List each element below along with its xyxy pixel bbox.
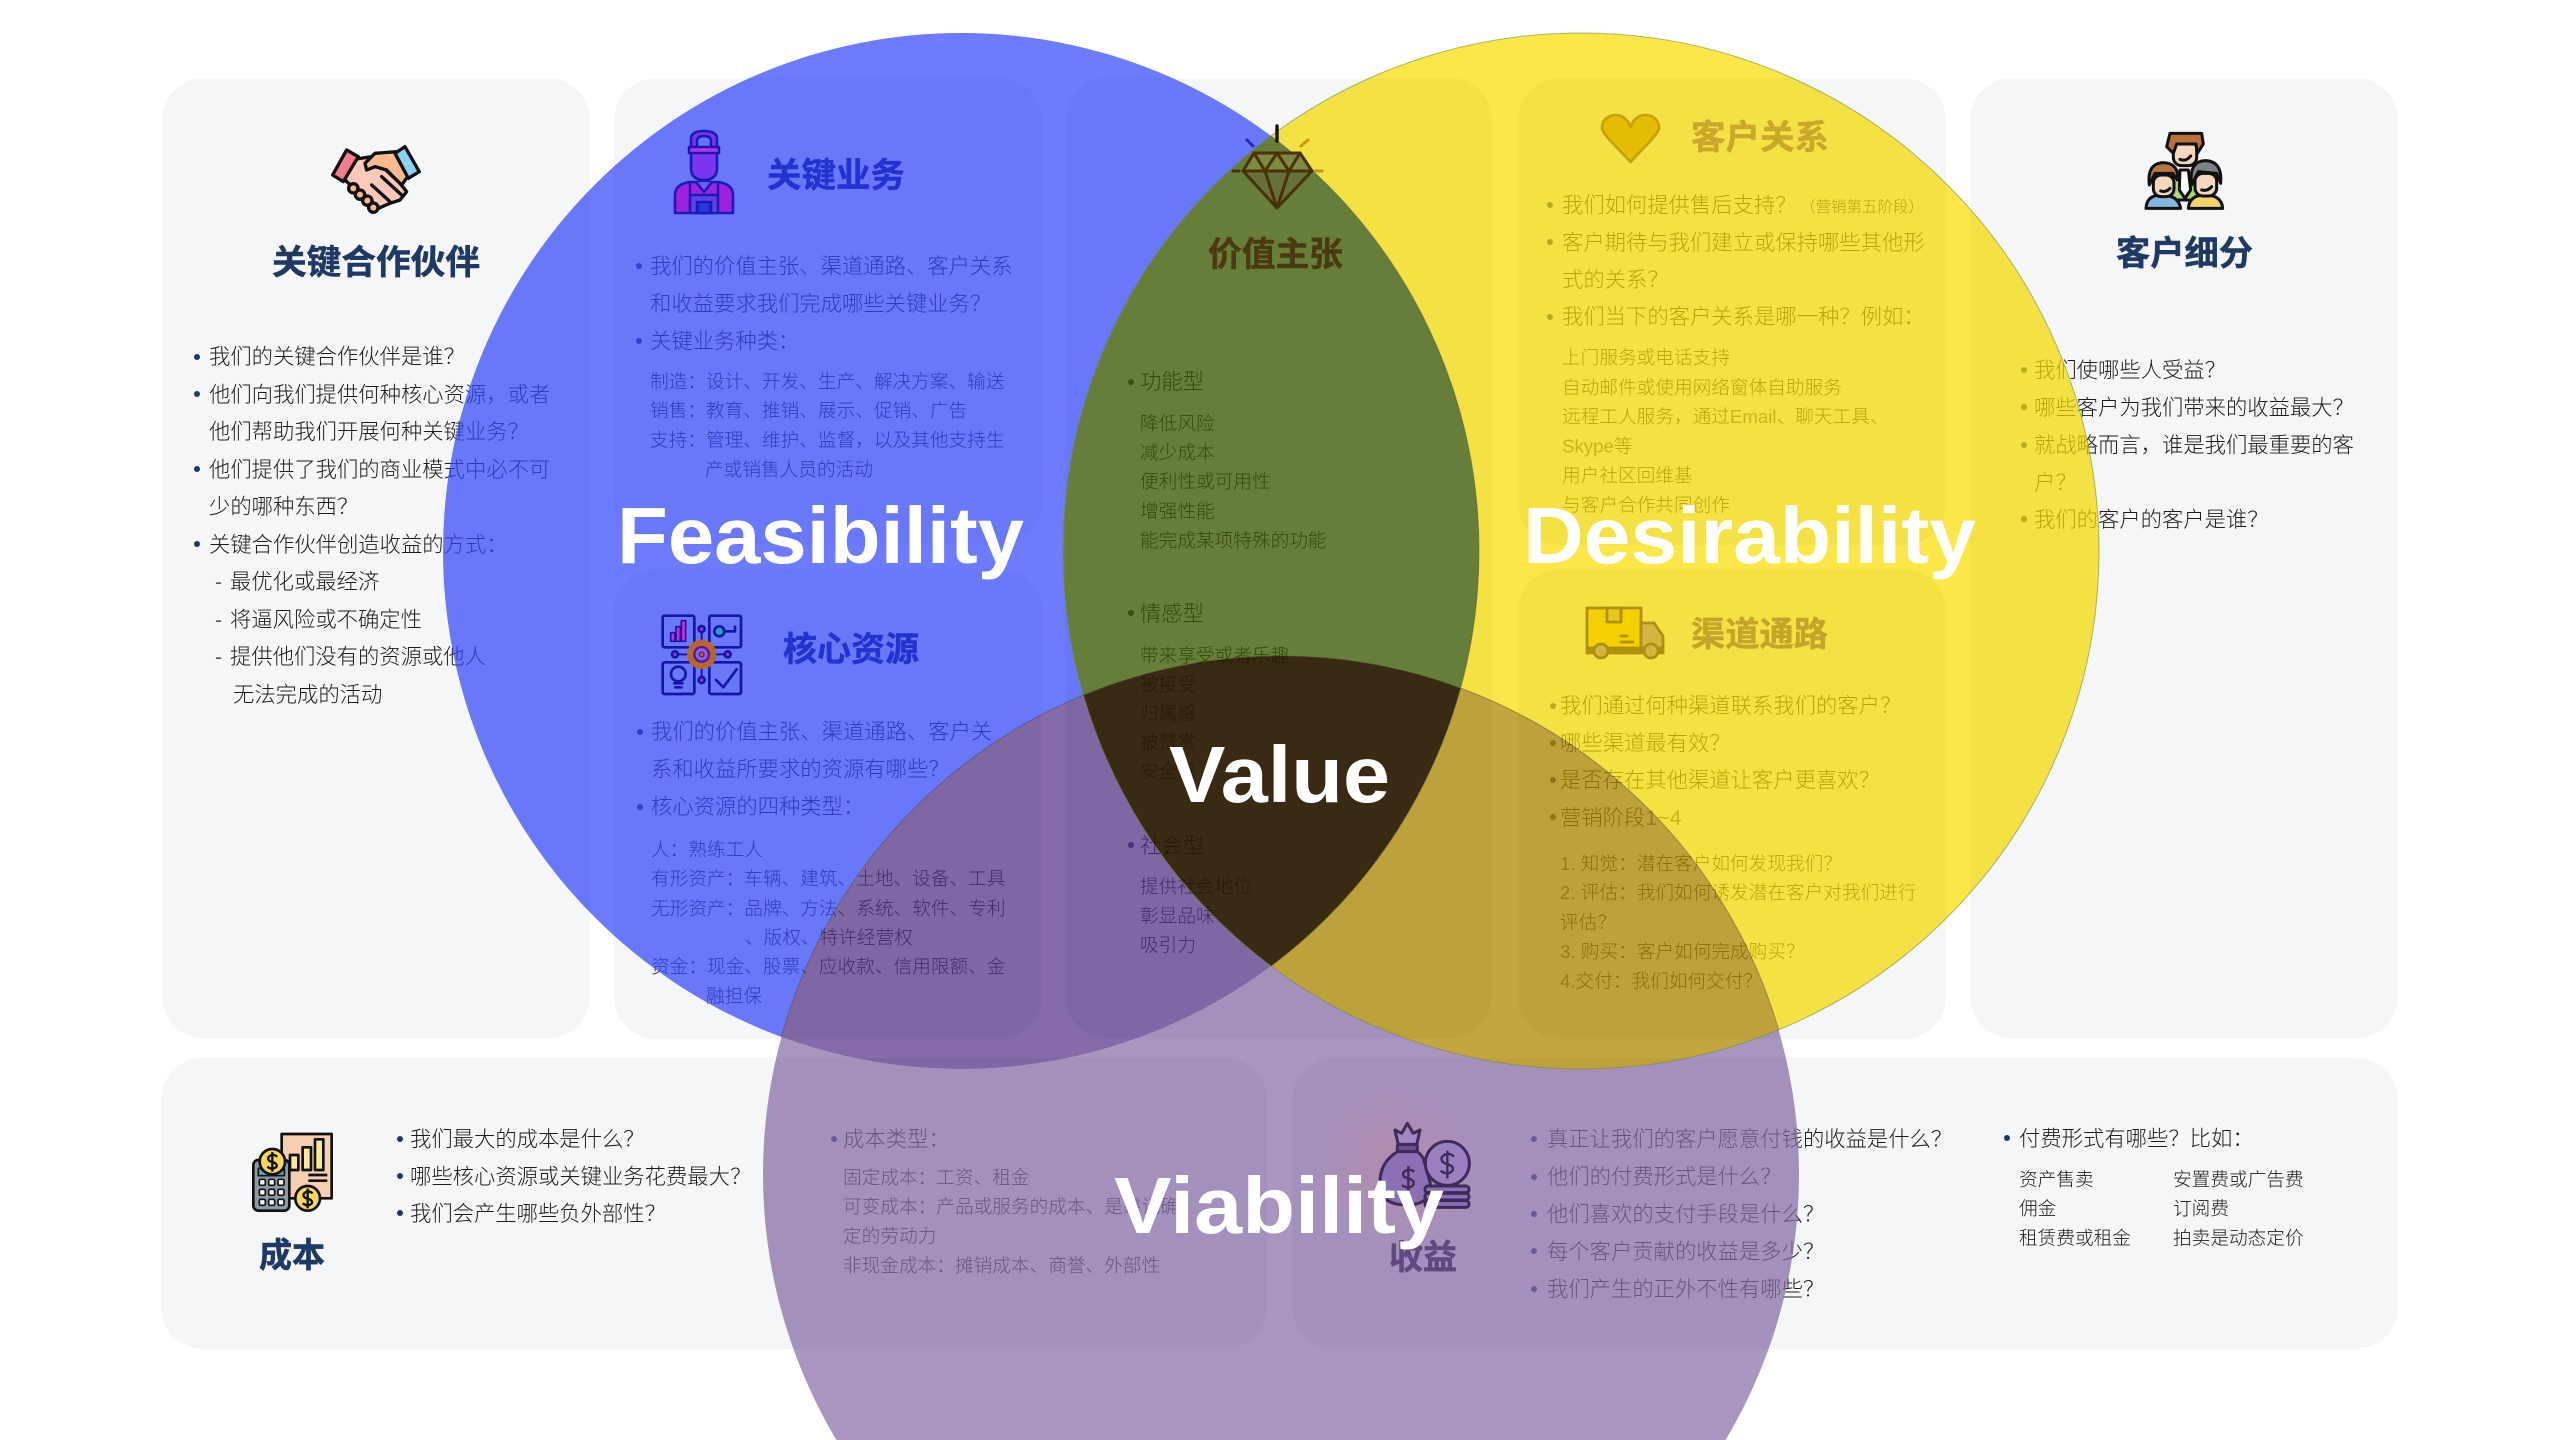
text: payment forms: 订阅费 [2173, 1198, 2229, 1219]
panel: cost structure [161, 1058, 1267, 1349]
text: revenue questions [1531, 1122, 1952, 1304]
text: key partners questions: - [215, 608, 222, 632]
text: key partners questions: 他们向我们提供何种核心资源，或者 [209, 378, 550, 409]
icon: handshake [333, 147, 419, 212]
icon: key resources [663, 616, 741, 694]
text: channels questions: 评估？ [1560, 908, 1616, 935]
panel: customer segments [1970, 78, 2398, 1038]
text: customer segments questions: 就战略而言，谁是我们最重要的客 [2034, 428, 2354, 460]
text: value proposition types: 降低风险 [1140, 413, 1215, 434]
heading: customer segments: 客户细分 [2116, 235, 2253, 273]
text: key partners questions: 无法完成的活动 [233, 683, 382, 707]
text: customer segments questions [2021, 354, 2354, 534]
text: key partners questions: 我们的关键合作伙伴是谁？ [209, 340, 465, 371]
icon: delivery truck [1587, 608, 1663, 658]
overlap: blue and purple [782, 695, 1271, 1069]
text: customer relationships questions: 远程工人服务，通过Email、聊天工具、 [1562, 402, 1888, 429]
label: Viability: Viability [1114, 1161, 1445, 1250]
text: customer relationships questions: Skype等 [1562, 436, 1633, 456]
text: value proposition types: 安全感 [1140, 761, 1196, 782]
text: customer relationships questions: （营销第五阶段） [1800, 198, 1924, 216]
text: key partners questions: 关键合作伙伴创造收益的方式： [209, 528, 508, 559]
text: key partners questions: 提供他们没有的资源或他人 [230, 645, 486, 669]
venn diagram circles [443, 33, 2099, 1440]
text: cost types: 定的劳动力 [843, 1226, 936, 1246]
text: key resources questions: 核心资源的四种类型： [651, 790, 864, 821]
heading: revenue streams: 收益 [1389, 1239, 1457, 1277]
text: value proposition types: 被接受 [1140, 674, 1196, 695]
text: key partners questions: 最优化或最经济 [230, 570, 379, 594]
text: customer relationships questions: 上门服务或电话支持 [1562, 347, 1730, 368]
text: cost types [831, 1122, 1179, 1278]
text: channels questions: 2. 评估：我们如何诱发潜在客户对我们进行 [1560, 878, 1917, 905]
text: payment forms [2004, 1122, 2304, 1248]
text: key partners questions [194, 340, 550, 707]
text: channels questions: 哪些渠道最有效？ [1560, 726, 1731, 758]
icon: heart [1602, 115, 1659, 162]
text: key partners questions: - [215, 645, 222, 669]
text: key partners questions: - [215, 570, 222, 594]
text: cost questions [397, 1122, 751, 1228]
panel backgrounds [161, 78, 2398, 1349]
text: key partners questions: 将逼风险或不确定性 [230, 608, 422, 632]
text: key activities questions: 我们的价值主张、渠道通路、客户关系 [650, 254, 1013, 278]
text: value proposition types: 彰显品味 [1140, 906, 1215, 926]
text: key resources questions: 融担保 [706, 986, 762, 1006]
text: customer relationships questions: 我们当下的客户关系是哪一种？例如： [1562, 300, 1925, 331]
icon: worker [675, 131, 733, 213]
decorative glow [1310, 1080, 1480, 1250]
text: key resources questions [637, 720, 1005, 1006]
panel: value proposition [1065, 78, 1492, 1038]
text: customer relationships questions: 自动邮件或使用网络窗体自助服务 [1562, 377, 1842, 398]
text: customer segments questions: 户？ [2034, 466, 2077, 497]
text: value proposition types: 能完成某项特殊的功能 [1140, 530, 1327, 551]
text: key activities questions: 制造：设计、开发、生产、解决方案、输送 [650, 367, 1005, 394]
text: customer relationships questions: 我们如何提供售后支持？ [1562, 188, 1797, 220]
text: key activities questions: 关键业务种类： [650, 324, 799, 356]
icon: customer group [2146, 133, 2223, 208]
text: key activities questions: 和收益要求我们完成哪些关键业务？ [650, 287, 991, 318]
text: key activities questions [636, 254, 1013, 480]
text: payment forms: 拍卖是动态定价 [2173, 1228, 2304, 1248]
text: payment forms: 租赁费或租金 [2019, 1228, 2131, 1248]
text: value proposition types: 社会型 [1140, 834, 1204, 858]
heading: cost structure: 成本 [259, 1237, 325, 1275]
heading: channels: 渠道通路 [1691, 616, 1828, 654]
circle: viability purple [763, 966, 1799, 1440]
text: revenue questions: 每个客户贡献的收益是多少？ [1547, 1235, 1824, 1266]
text: channels questions: 1. 知觉：潜在客户如何发现我们？ [1560, 849, 1842, 876]
text: key activities questions: 产或销售人员的活动 [705, 459, 873, 480]
overlap: blue and yellow [1063, 136, 1479, 695]
text: key resources questions: 我们的价值主张、渠道通路、客户关 [651, 720, 992, 744]
icon: cost calculator and report [253, 1134, 332, 1211]
text: key resources questions: 资金：现金、股票、应收款、信用限额、金 [651, 952, 1005, 979]
text: channels questions: 4.交付：我们如何交付？ [1560, 966, 1762, 994]
text: key partners questions: 少的哪种东西？ [209, 490, 358, 521]
label: Value: Value [1169, 730, 1390, 819]
text: customer relationships questions [1547, 188, 1925, 516]
text: payment forms: 安置费或广告费 [2173, 1169, 2304, 1190]
heading: key partners: 关键合作伙伴 [272, 244, 480, 282]
text: customer relationships questions: 客户期待与我们建立或保持哪些其他形 [1562, 231, 1925, 255]
text: key partners questions: 他们帮助我们开展何种关键业务？ [209, 415, 529, 446]
text: revenue questions: 他们喜欢的支付手段是什么？ [1547, 1198, 1824, 1228]
text: value proposition types: 提供社会地位 [1140, 876, 1252, 897]
icon: diamond [1233, 126, 1322, 208]
text: cost types: 成本类型： [843, 1122, 950, 1154]
label: Desirability: Desirability [1523, 491, 1977, 580]
text: revenue questions: 他们的付费形式是什么？ [1547, 1160, 1782, 1191]
text: revenue questions: 真正让我们的客户愿意付钱的收益是什么？ [1547, 1122, 1952, 1154]
text: key activities questions: 销售：教育、推销、展示、促销、广告 [650, 396, 967, 423]
heading: key resources: 核心资源 [783, 631, 919, 669]
panel: customer relationships [1518, 78, 1946, 545]
text: channels questions: 3. 购买：客户如何完成购买？ [1560, 937, 1805, 964]
overlap: yellow and purple [1271, 688, 1778, 1069]
text: customer relationships questions: 式的关系？ [1562, 263, 1669, 294]
text: value proposition types: 情感型 [1140, 602, 1204, 626]
circle: desirability yellow [1271, 33, 2099, 1030]
text: customer relationships questions: 用户社区回维基 [1562, 465, 1693, 486]
panel: key resources [614, 569, 1042, 1039]
text: customer relationships questions: 与客户合作共同创作 [1562, 494, 1730, 516]
text: channels questions: 是否存在其他渠道让客户更喜欢？ [1560, 764, 1880, 794]
text: cost types: 可变成本：产品或服务的成本、是靠记确 [843, 1192, 1179, 1219]
text: value proposition types: 便利性或可用性 [1140, 471, 1271, 492]
text: customer segments questions: 哪些客户为我们带来的收益最大？ [2034, 391, 2354, 422]
text: value proposition types: 增强性能 [1140, 500, 1215, 522]
text: key partners questions: 他们提供了我们的商业模式中必不可 [209, 458, 550, 482]
text: value proposition types: 被赞赏 [1140, 732, 1196, 753]
text: key activities questions: 支持：管理、维护、监督，以及其他支持生 [650, 426, 1004, 452]
text: cost types: 非现金成本：摊销成本、商誉、外部性 [843, 1251, 1160, 1278]
circle: feasibility blue [443, 33, 1271, 1037]
text: channels questions: 我们通过何种渠道联系我们的客户？ [1560, 689, 1901, 720]
panel: channels [1518, 569, 1946, 1039]
text: customer segments questions: 我们使哪些人受益？ [2034, 354, 2226, 384]
text: value proposition types: 功能型 [1140, 370, 1204, 394]
text: value proposition types: 减少成本 [1140, 442, 1215, 463]
text: cost questions: 哪些核心资源或关键业务花费最大？ [410, 1160, 751, 1191]
text: value proposition types [1128, 370, 1327, 956]
text: key resources questions: 系和收益所要求的资源有哪些？ [651, 752, 950, 784]
text: revenue questions: 我们产生的正外不性有哪些？ [1547, 1272, 1824, 1304]
label: Feasibility: Feasibility [617, 491, 1025, 580]
heading: key activities: 关键业务 [767, 157, 905, 195]
text: value proposition types: 归属感 [1140, 703, 1196, 724]
heading: value proposition: 价值主张 [1208, 236, 1343, 274]
panel: key partners [162, 78, 590, 1038]
text: cost questions: 我们最大的成本是什么？ [410, 1122, 645, 1154]
text: customer segments questions: 我们的客户的客户是谁？ [2034, 503, 2269, 534]
text: channels questions [1550, 689, 1917, 994]
text: key resources questions: 有形资产：车辆、建筑、土地、设备、工具 [651, 864, 1005, 891]
panel: revenue streams [1292, 1058, 2398, 1349]
text: key resources questions: 人：熟练工人 [651, 835, 763, 862]
text: value proposition types: 吸引力 [1140, 934, 1196, 956]
text: cost questions: 我们会产生哪些负外部性？ [410, 1197, 666, 1228]
heading: customer relationships: 客户关系 [1691, 119, 1829, 157]
text: payment forms: 付费形式有哪些？比如： [2019, 1122, 2254, 1153]
text: cost types: 固定成本：工资、租金 [843, 1163, 1030, 1190]
text: key resources questions: 、版权、特许经营权 [745, 927, 913, 948]
panel: key activities [614, 78, 1042, 545]
overlap: value center [1084, 656, 1460, 966]
text: key resources questions: 无形资产：品牌、方法、系统、软件、专利 [651, 894, 1005, 921]
text: payment forms: 资产售卖 [2019, 1169, 2094, 1190]
text: payment forms: 佣金 [2019, 1198, 2056, 1219]
text: channels questions: 营销阶段1~4 [1560, 806, 1682, 830]
icon: money bag and coins [1380, 1123, 1469, 1207]
text: value proposition types: 带来享受或者乐趣 [1140, 645, 1289, 666]
